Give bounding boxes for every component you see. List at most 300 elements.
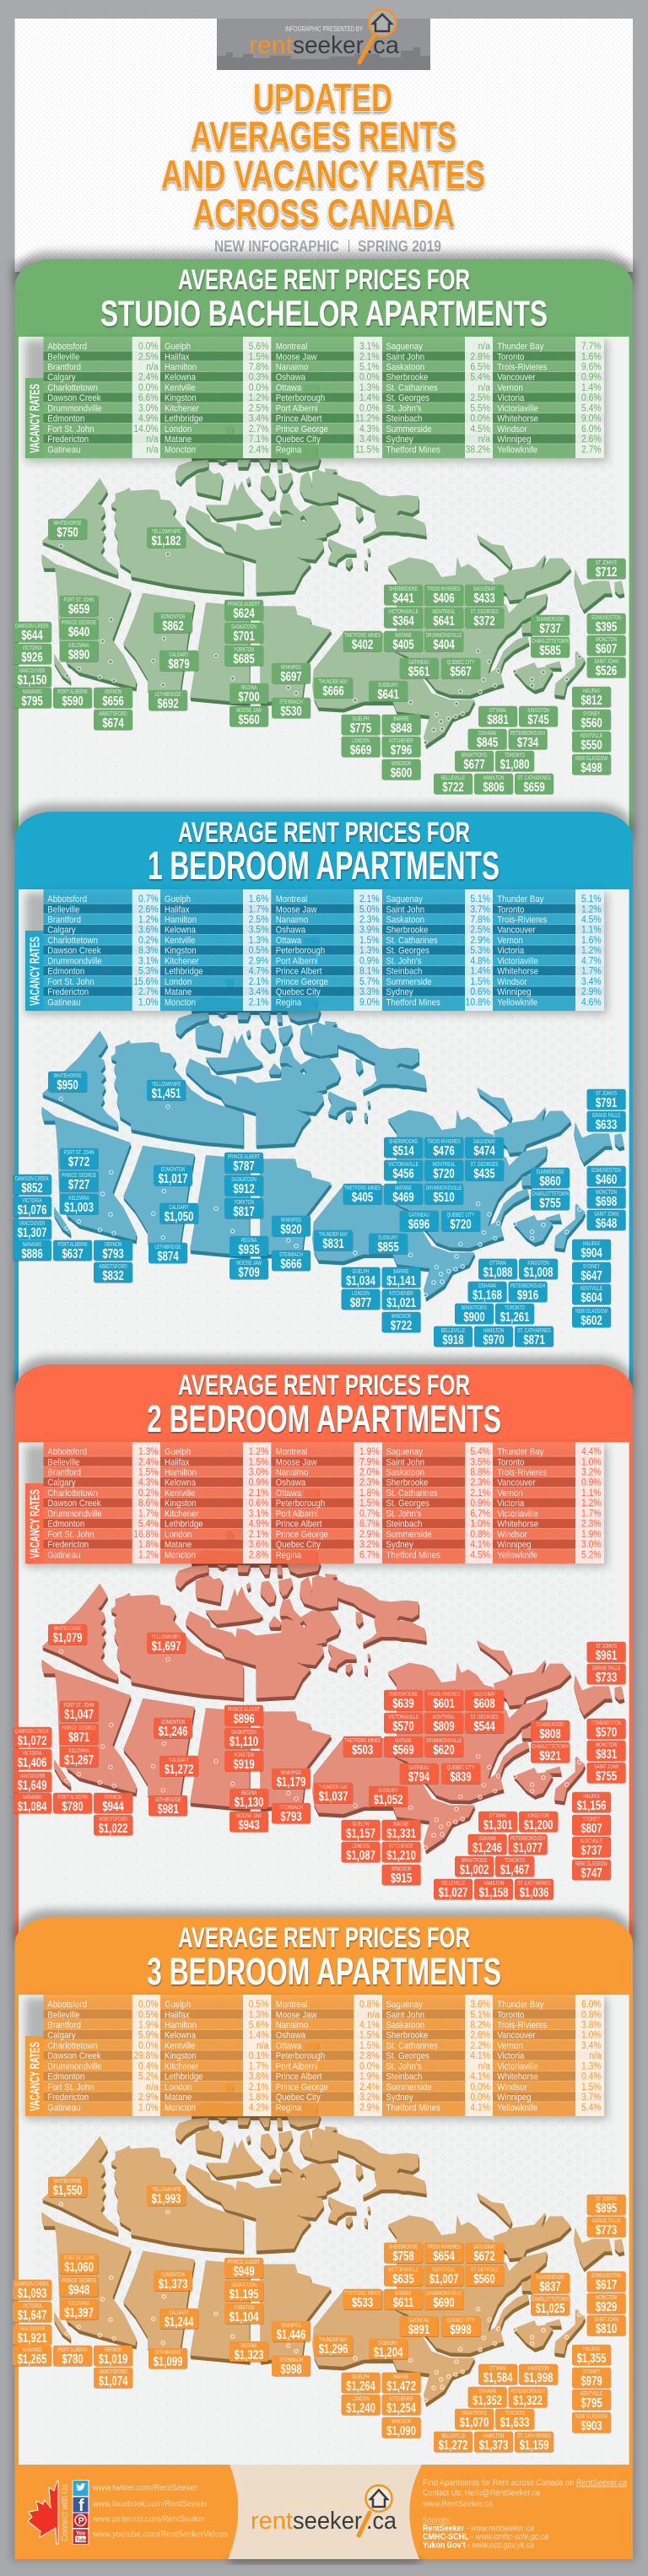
vacancy rates table: Whitehorse [497, 413, 538, 424]
rent price tags: ST. CATHARINES [517, 1880, 551, 1887]
rent price tags: $773 [596, 2222, 618, 2237]
vacancy rates table: Fort St. John [47, 424, 94, 435]
rent price tags: ST. CATHARINES [517, 1327, 551, 1334]
vacancy rates table: Vancouver [497, 1477, 536, 1488]
rent price tags: GATINEAU [408, 1212, 429, 1218]
rent price tags: $831 [322, 1236, 344, 1250]
vacancy rates table: 4.9% [138, 413, 159, 424]
vacancy rates table: 9.0% [581, 413, 602, 424]
vacancy rates table: 2.6% [138, 905, 159, 915]
vacancy rates table: Brantford [47, 1467, 81, 1478]
rent price tags: REGINA [241, 1237, 257, 1244]
rent price tags: CHARLOTTETOWN [532, 2296, 569, 2303]
vacancy rates table: London [165, 976, 192, 987]
rent price tags: $697 [280, 669, 302, 683]
rent price tags: THETFORD MINES [344, 1185, 381, 1191]
vacancy rates table: n/a [146, 2082, 159, 2093]
rent price tags: $1,047 [64, 1707, 94, 1721]
rent price tags: TORONTO [505, 752, 525, 759]
vacancy rates table: 0.9% [470, 1499, 490, 1509]
rent price tags: ST JOHN'S [596, 1643, 617, 1650]
rent price tags: EDMONTON [161, 1166, 185, 1173]
vacancy rates table: n/a [478, 2061, 491, 2071]
vacancy rates table: 1.7% [581, 1509, 602, 1519]
rent price tags: PORT ALBERNI [57, 1794, 88, 1801]
rent price tags: $772 [68, 1154, 89, 1169]
vacancy rates table: 5.3% [470, 946, 490, 956]
footer centre logo panel: INFOGRAPHIC PRESENTED BY [283, 2501, 362, 2508]
vacancy rates table: Kitchener [165, 956, 199, 967]
rent price tags: $570 [596, 1725, 617, 1739]
rent price tags: VICTORIA [23, 1750, 42, 1757]
rent price tags: GUELPH [352, 2373, 370, 2380]
vacancy rates table: Winnipeg [497, 434, 532, 445]
vacancy rates table: 38.2% [466, 445, 490, 455]
rent price tags: $1,074 [99, 2373, 128, 2388]
rent price tags: $395 [596, 619, 618, 634]
rent price tags: $672 [473, 2249, 495, 2263]
rent price tags: ST. GEORGES [470, 1714, 499, 1720]
rent price tags: $720 [433, 1166, 455, 1180]
rent price tags: $1,265 [18, 2352, 47, 2366]
vacancy rates table: 1.6% [249, 894, 269, 905]
rent price tags: KELOWNA [68, 1747, 89, 1754]
rent price tags: $1,264 [346, 2379, 375, 2393]
vacancy rates table: 3.1% [359, 342, 380, 352]
vacancy rates table: 11.2% [355, 413, 380, 424]
vacancy rates table: Saguenay [386, 341, 424, 352]
vacancy rates table: Hamilton [165, 2020, 197, 2031]
rent price tags: $1,921 [18, 2330, 47, 2345]
rent price tags: $915 [391, 1871, 413, 1885]
vacancy rates table: Port Alberni [276, 956, 318, 967]
rent price tags: $926 [21, 650, 43, 664]
vacancy rates table: 1.7% [249, 2061, 269, 2071]
vacancy rates table: Guelph [165, 341, 191, 352]
vacancy rates table: 1.8% [138, 1540, 159, 1550]
vacancy rates table: Peterborough [276, 945, 325, 956]
rent price tags: DAWSON CREEK [15, 1728, 50, 1735]
vacancy rates table: 3.1% [138, 956, 159, 966]
rent price tags: OSHAWA [478, 730, 497, 737]
vacancy rates table: 2.1% [249, 1529, 269, 1540]
vacancy rates table: 2.3% [359, 1477, 380, 1488]
vacancy rates table: Saguenay [386, 1446, 424, 1457]
rent price tags: $644 [21, 628, 43, 642]
rent price tags: $600 [391, 765, 412, 780]
rent price tags: VANCOUVER [19, 1220, 46, 1227]
vacancy rates table: Quebec City [276, 434, 321, 445]
vacancy rates table: 4.3% [359, 424, 380, 435]
rent price tags: SHERBROOKE [389, 586, 418, 592]
rent price tags: MONCTON [596, 1189, 617, 1196]
vacancy rates table: 14.0% [133, 424, 159, 435]
vacancy rates table: n/a [146, 435, 159, 445]
rent price tags: $533 [352, 2295, 374, 2309]
rent price tags: $607 [596, 641, 617, 656]
rent price tags: EDMUNDSTON [591, 614, 621, 621]
vacancy rates table: 1.0% [470, 1519, 490, 1530]
vacancy rates table: Moose Jaw [276, 2010, 317, 2021]
rent price tags: OTTAWA [489, 707, 507, 714]
rent price tags: $1,254 [386, 2400, 416, 2415]
rent price tags: $745 [527, 712, 549, 726]
vacancy rates table: 4.7% [581, 956, 602, 966]
vacancy rates table: 2.9% [359, 1529, 380, 1540]
rent price tags: PORT ALBERNI [57, 689, 88, 695]
rent price tags: $372 [473, 613, 495, 628]
rent price tags: $998 [450, 2322, 472, 2336]
vacancy rates table: n/a [146, 445, 159, 455]
vacancy rates table: n/a [478, 435, 491, 445]
rent price tags: OSHAWA [478, 1283, 497, 1289]
vacancy rates table: Quebec City [276, 1539, 321, 1550]
vacancy rates table: 1.3% [249, 2010, 269, 2020]
rent price tags: $696 [408, 1217, 430, 1231]
vacancy rates table [25, 889, 608, 1014]
vacancy rates table: 1.1% [581, 925, 602, 936]
rent price tags: REGINA [241, 1790, 257, 1796]
vacancy rates table: 1.9% [359, 2071, 380, 2082]
rent price tags: $916 [517, 1288, 539, 1302]
vacancy rates table: 0.0% [470, 413, 490, 424]
vacancy rates table: Regina [276, 445, 301, 456]
rent price tags: $737 [580, 1843, 602, 1857]
vacancy rates table: Trois-Rivieres [497, 915, 547, 926]
rent price tags: CALGARY [169, 2309, 189, 2316]
rent price tags: OTTAWA [489, 2365, 507, 2372]
vacancy rates table: Sydney [386, 434, 413, 445]
rent price tags: $904 [580, 1245, 602, 1260]
footer centre logo panel [228, 2465, 422, 2559]
vacancy rates table: Moncton [165, 2103, 196, 2114]
vacancy rates table: 2.2% [470, 2040, 490, 2051]
footer centre logo panel: .ca [366, 2508, 397, 2535]
vacancy rates table: Halifax [165, 1457, 190, 1468]
vacancy rates table: 1.4% [581, 382, 602, 393]
rent price tags: QUEBEC CITY [446, 1764, 475, 1771]
rent price tags: $1,467 [500, 1862, 529, 1877]
heading: AVERAGE RENT PRICES FOR [178, 817, 470, 849]
rent price tags: LONDON [352, 2395, 370, 2402]
vacancy rates table: Abbotsford [47, 894, 87, 905]
vacancy rates table: Sherbrooke [386, 925, 428, 936]
vacancy rates table: 4.8% [470, 956, 490, 966]
vacancy rates table: 5.4% [470, 1447, 490, 1457]
rent price tags: BELLEVILLE [441, 1880, 465, 1887]
rent price tags: $852 [21, 1180, 43, 1195]
rent price tags: FORT ST. JOHN [63, 1702, 94, 1709]
rent price tags: HAMILTON [483, 1880, 504, 1887]
rent price tags: MONTREAL [432, 1161, 456, 1168]
vacancy rates table: 0.5% [249, 946, 269, 956]
rent price tags: MONCTON [596, 636, 617, 643]
rent price tags: $1,025 [536, 2301, 565, 2315]
vacancy rates table: St. Georges [386, 2050, 429, 2061]
vacancy rates table: Fredericton [47, 434, 89, 445]
vacancy rates table: 5.4% [581, 403, 602, 413]
rent price tags: $1,070 [460, 2415, 489, 2429]
rent price tags: $474 [473, 1143, 495, 1158]
rent price tags: SAGUENAY [473, 1138, 496, 1145]
vacancy rates table: Lethbridge [165, 1519, 203, 1530]
vacancy rates table: Prince George [276, 424, 328, 435]
rent price tags: $1,649 [18, 1778, 47, 1792]
vacancy rates table: Calgary [47, 1477, 76, 1488]
vacancy rates table: 0.9% [249, 1477, 269, 1488]
rent price tags: PETERBOROUGH [510, 1283, 545, 1289]
vacancy rates table: 1.5% [359, 935, 380, 946]
rent price tags: PORT ALBERNI [57, 2346, 88, 2353]
vacancy rates table: 0.3% [249, 372, 269, 383]
vacancy rates table: 1.2% [249, 393, 269, 403]
rent price tags: $1,397 [64, 2305, 94, 2319]
vacancy rates table: n/a [256, 2040, 269, 2051]
rent price tags: SUDBURY [378, 682, 399, 689]
vacancy rates table: 2.7% [138, 987, 159, 997]
vacancy rates table: 1.5% [581, 2082, 602, 2093]
vacancy rates table: 3.5% [249, 925, 269, 936]
vacancy rates table: Vernon [497, 2040, 523, 2051]
rent price tags: KINGSTON [527, 707, 549, 714]
rent price tags: SUDBURY [378, 1234, 399, 1241]
contact text [422, 2479, 627, 2509]
contact text: Contact Us: Hello@RentSeeker.ca [423, 2489, 540, 2498]
vacancy rates table: n/a [478, 382, 491, 393]
rent price tags: KELOWNA [68, 1195, 89, 1202]
rent price tags: VICTORIA [23, 645, 42, 651]
rent price tags: $1,446 [277, 2327, 306, 2341]
rent price tags: STEINBACH [279, 699, 303, 705]
connect with us: Connect with Us [60, 2484, 70, 2541]
vacancy rates table: Hamilton [165, 915, 197, 926]
rent price tags: BARRIE [393, 716, 409, 722]
vacancy rates table: Fort St. John [47, 976, 94, 987]
rent price tags: VICTORIAVILLE [388, 1714, 418, 1720]
vacancy rates table: 3.2% [359, 2093, 380, 2103]
rent price tags: KENTVILLE [580, 1285, 602, 1292]
vacancy rates table: 3.2% [359, 1540, 380, 1550]
rent price tags: ST. GEORGES [470, 1161, 499, 1168]
footer centre logo panel: seeker [293, 2508, 362, 2535]
rent price tags: $709 [238, 1265, 260, 1279]
vacancy rates table: Steinbach [386, 2071, 423, 2082]
vacancy rates table: Lethbridge [165, 2071, 203, 2082]
vacancy rates table: 0.0% [470, 2093, 490, 2103]
vacancy rates table: 0.9% [581, 372, 602, 383]
social icons: f [78, 2497, 84, 2515]
vacancy rates table: 2.1% [249, 976, 269, 987]
rent price tags: PRINCE GEORGE [62, 619, 96, 626]
rent price tags: $1,052 [374, 1792, 402, 1806]
rent price tags: TORONTO [505, 1304, 525, 1311]
social links: www.facebook.com/RentSeeker [92, 2499, 208, 2509]
vacancy rates table: 0.6% [470, 987, 490, 997]
vacancy rates table: Gatineau [47, 1550, 81, 1561]
vacancy rates table: Peterborough [276, 392, 325, 403]
vacancy rates table: Regina [276, 997, 301, 1008]
vacancy rates table: 0.5% [138, 2010, 159, 2020]
rent price tags: $747 [580, 1866, 602, 1880]
rent price tags: $929 [596, 2299, 618, 2314]
vacancy rates table: Matane [165, 986, 192, 997]
vacancy rates table: Fredericton [47, 2092, 89, 2103]
rent price tags: OSHAWA [478, 2388, 497, 2395]
vacancy rates table: 4.3% [138, 1477, 159, 1488]
vacancy rates table: Windsor [497, 976, 527, 987]
vacancy rates table: Montreal [276, 894, 307, 905]
vacancy rates table: Yellowknife [497, 1550, 537, 1561]
rent price tags: $737 [539, 621, 561, 635]
rent price tags: $690 [433, 2295, 455, 2309]
rent price tags: $647 [580, 1268, 602, 1283]
vacancy rates table: 1.4% [470, 966, 490, 977]
rent price tags: $890 [68, 647, 89, 662]
social icons: You [76, 2531, 85, 2536]
rent price tags: WINNIPEG [281, 664, 301, 671]
vacancy rates table: 0.0% [138, 2040, 159, 2051]
rent price tags: KELOWNA [68, 642, 89, 649]
rent price tags: LONDON [352, 1843, 370, 1850]
rent price tags: SAGUENAY [473, 586, 496, 592]
title: AND VACANCY RATES [161, 152, 485, 197]
vacancy rates table: Quebec City [276, 2092, 321, 2103]
vacancy rates table: Steinbach [386, 1519, 423, 1530]
rent price tags: $1,200 [524, 1817, 553, 1832]
map of Canada [41, 937, 624, 1302]
vacancy rates table: 0.0% [470, 2082, 490, 2093]
vacancy rates table: Saskatoon [386, 362, 424, 373]
rent price tags: $656 [102, 694, 124, 708]
rent price tags: $1,179 [277, 1774, 306, 1789]
rent price tags: $1,022 [99, 1821, 127, 1835]
vacancy rates table: Kitchener [165, 2061, 199, 2072]
vacancy rates table [25, 1995, 608, 2120]
rent price tags: DAWSON CREEK [15, 2281, 50, 2287]
vacancy rates table: Abbotsford [47, 341, 87, 352]
rent price tags: $720 [450, 1217, 472, 1231]
rent price tags: PRINCE ALBERT [228, 2259, 260, 2265]
vacancy rates table: Kingston [165, 392, 197, 403]
rent price tags: SUMMERSIDE [536, 1721, 564, 1728]
vacancy rates table: Moncton [165, 1550, 196, 1561]
rent price tags: PRINCE ALBERT [228, 601, 260, 608]
vacancy rates table: n/a [146, 362, 159, 373]
vacancy rates table: Victoria [497, 1498, 524, 1509]
rent price tags: $1,072 [18, 1733, 46, 1747]
vacancy rates table: 5.5% [470, 403, 490, 413]
rent price tags: $364 [392, 613, 414, 628]
rent price tags: $1,323 [235, 2347, 264, 2362]
rent price tags: SASKATOON [231, 1176, 256, 1183]
rent price tags: $920 [280, 1222, 302, 1236]
rent price tags: $918 [442, 1332, 464, 1347]
vacancy rates table: Prince George [276, 1529, 328, 1540]
vacancy rates table: 1.2% [138, 1550, 159, 1560]
rent price tags: CALGARY [169, 1204, 189, 1211]
rent price tags: $666 [280, 1256, 302, 1271]
wordmark: .ca [366, 32, 400, 59]
vacancy rates table: Thunder Bay [497, 894, 544, 905]
vacancy rates table: 1.0% [581, 2030, 602, 2041]
vacancy rates table: 3.4% [249, 987, 269, 997]
rent price tags: SAINT JOHN [594, 2316, 618, 2323]
vacancy rates table: Victoria [497, 2050, 524, 2061]
rent price tags: GATINEAU [408, 2317, 429, 2324]
vacancy rates table: Prince Albert [276, 413, 321, 424]
rent price tags: MATANE [395, 1185, 412, 1191]
vacancy rates table: 2.5% [470, 393, 490, 403]
rent price tags: GRAND FALLS [592, 2217, 620, 2224]
rent price tags: $640 [68, 624, 89, 639]
rent price tags: $1,451 [152, 1086, 181, 1100]
vacancy rates table: 3.7% [470, 905, 490, 915]
vacancy rates table: 5.2% [581, 1550, 602, 1560]
rent price tags: KINGSTON [527, 1812, 549, 1819]
vacancy rates table: 1.8% [359, 1488, 380, 1499]
rent price tags: TROIS-RIVIERES [427, 2244, 461, 2250]
rent price tags: $793 [102, 1246, 124, 1261]
vacancy rates table: 3.6% [470, 2000, 490, 2010]
rent price tags: HAMILTON [483, 2433, 504, 2439]
vacancy rates table: Fort St. John [47, 2082, 94, 2093]
vacancy rates table: 4.4% [581, 1447, 602, 1457]
rent price tags: $722 [442, 780, 464, 794]
rent price tags: $544 [473, 1719, 495, 1733]
vacancy rates table: Yellowknife [497, 997, 537, 1008]
rent price tags: $601 [433, 1696, 455, 1710]
vacancy rates table: Dawson Creek [47, 2050, 101, 2061]
vacancy rates table: Brantford [47, 2020, 81, 2031]
vacancy rates table: Nanaimo [276, 2020, 308, 2031]
rent price tags: $1,037 [319, 1789, 348, 1803]
vacancy rates table: Oshawa [276, 372, 305, 383]
vacancy rates table: Saint John [386, 2010, 424, 2021]
rent price tags: EDMONTON [161, 613, 185, 620]
rent price tags: $712 [596, 564, 617, 579]
rent price tags [13, 519, 626, 795]
vacancy rates table: Winnipeg [497, 986, 532, 997]
rent price tags: PRINCE GEORGE [62, 1725, 96, 1731]
subtitle: SPRING 2019 [358, 238, 441, 255]
rent price tags: $1,157 [346, 1826, 375, 1840]
rent price tags: $1,261 [500, 1310, 530, 1324]
vacancy rates table: 1.3% [359, 382, 380, 393]
vacancy rates table: 1.2% [581, 905, 602, 915]
rent price tags: TORONTO [505, 2410, 525, 2417]
vacancy rates table: Kelowna [165, 1477, 196, 1488]
rent price tags: $1,301 [483, 1817, 513, 1832]
vacancy rates table: 5.1% [359, 362, 380, 373]
vacancy rates table: Hamilton [165, 1467, 197, 1478]
rent price tags: $817 [233, 1204, 255, 1218]
rent price tags: $944 [102, 1799, 124, 1813]
rent price tags: MATANE [395, 1737, 412, 1744]
vacancy rates table: 5.1% [470, 894, 490, 905]
rent price tags: $970 [483, 1332, 505, 1347]
vacancy rates table: 7.8% [470, 915, 490, 926]
rent price tags: ST. CATHARINES [517, 775, 551, 781]
rent price tags: $1,472 [386, 2379, 416, 2393]
vacancy rates table: 5.0% [359, 905, 380, 915]
vacancy rates table: 3.4% [249, 413, 269, 424]
vacancy rates table: Brantford [47, 362, 81, 373]
rent price tags: WINNIPEG [281, 1217, 301, 1223]
vacancy rates table: 2.1% [249, 1488, 269, 1499]
panel: studio bachelor apartments [13, 251, 633, 844]
vacancy rates table: 1.7% [138, 1509, 159, 1519]
rent price tags: EDMUNDSTON [591, 2272, 621, 2279]
